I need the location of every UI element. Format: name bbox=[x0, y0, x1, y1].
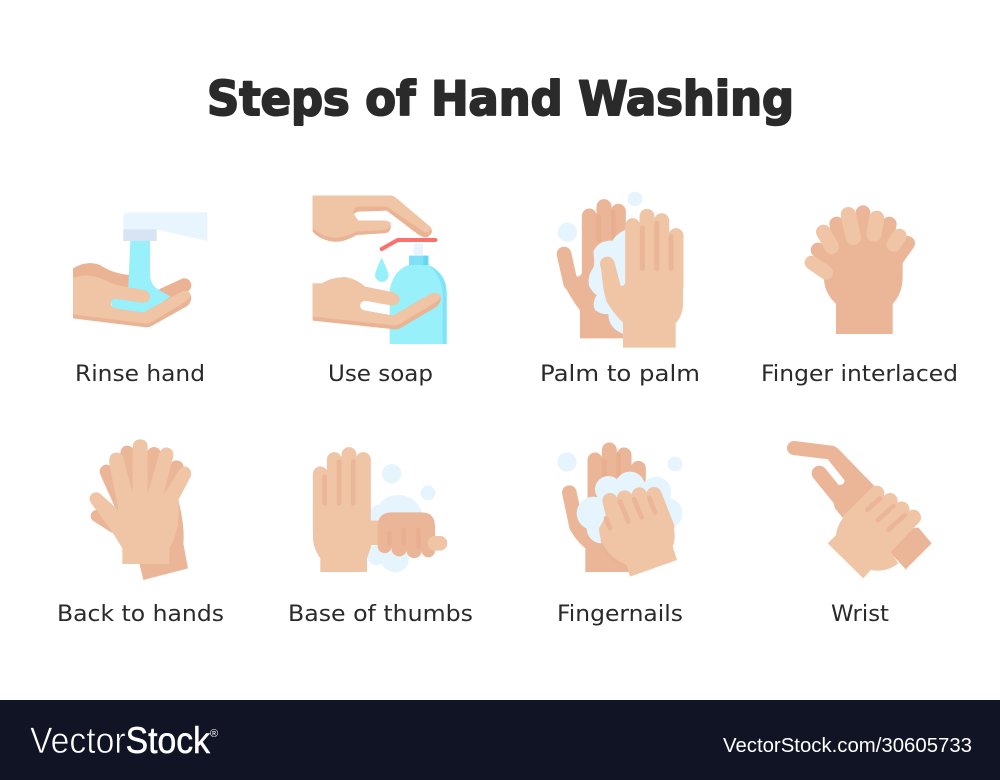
footer logo: VectorStock bbox=[30, 720, 210, 761]
label: rinse hand: Rinse hand bbox=[75, 362, 205, 387]
label: palm to palm: Palm to palm bbox=[540, 362, 700, 387]
icon: palm to palm bbox=[558, 192, 683, 348]
icon: use soap bbox=[313, 196, 447, 344]
icon: finger interlaced bbox=[812, 213, 908, 334]
label: fingernails: Fingernails bbox=[557, 602, 683, 627]
icon: fingernails bbox=[557, 450, 682, 577]
icon: rinse hand bbox=[73, 212, 207, 327]
label: wrist: Wrist bbox=[831, 602, 889, 627]
label: finger interlaced: Finger interlaced bbox=[761, 362, 958, 387]
icon: wrist bbox=[794, 446, 932, 578]
footer bar bbox=[0, 700, 1000, 780]
registered mark: ® bbox=[210, 728, 218, 740]
icon: back to hands bbox=[89, 439, 191, 580]
label: back to hands: Back to hands bbox=[57, 602, 224, 627]
footer image id: VectorStock.com/30605733 bbox=[723, 735, 972, 757]
icon: base of thumbs bbox=[313, 455, 440, 572]
label: base of thumbs: Base of thumbs bbox=[288, 602, 473, 627]
title: Steps of Hand Washing bbox=[207, 72, 794, 127]
label: use soap: Use soap bbox=[328, 362, 433, 387]
